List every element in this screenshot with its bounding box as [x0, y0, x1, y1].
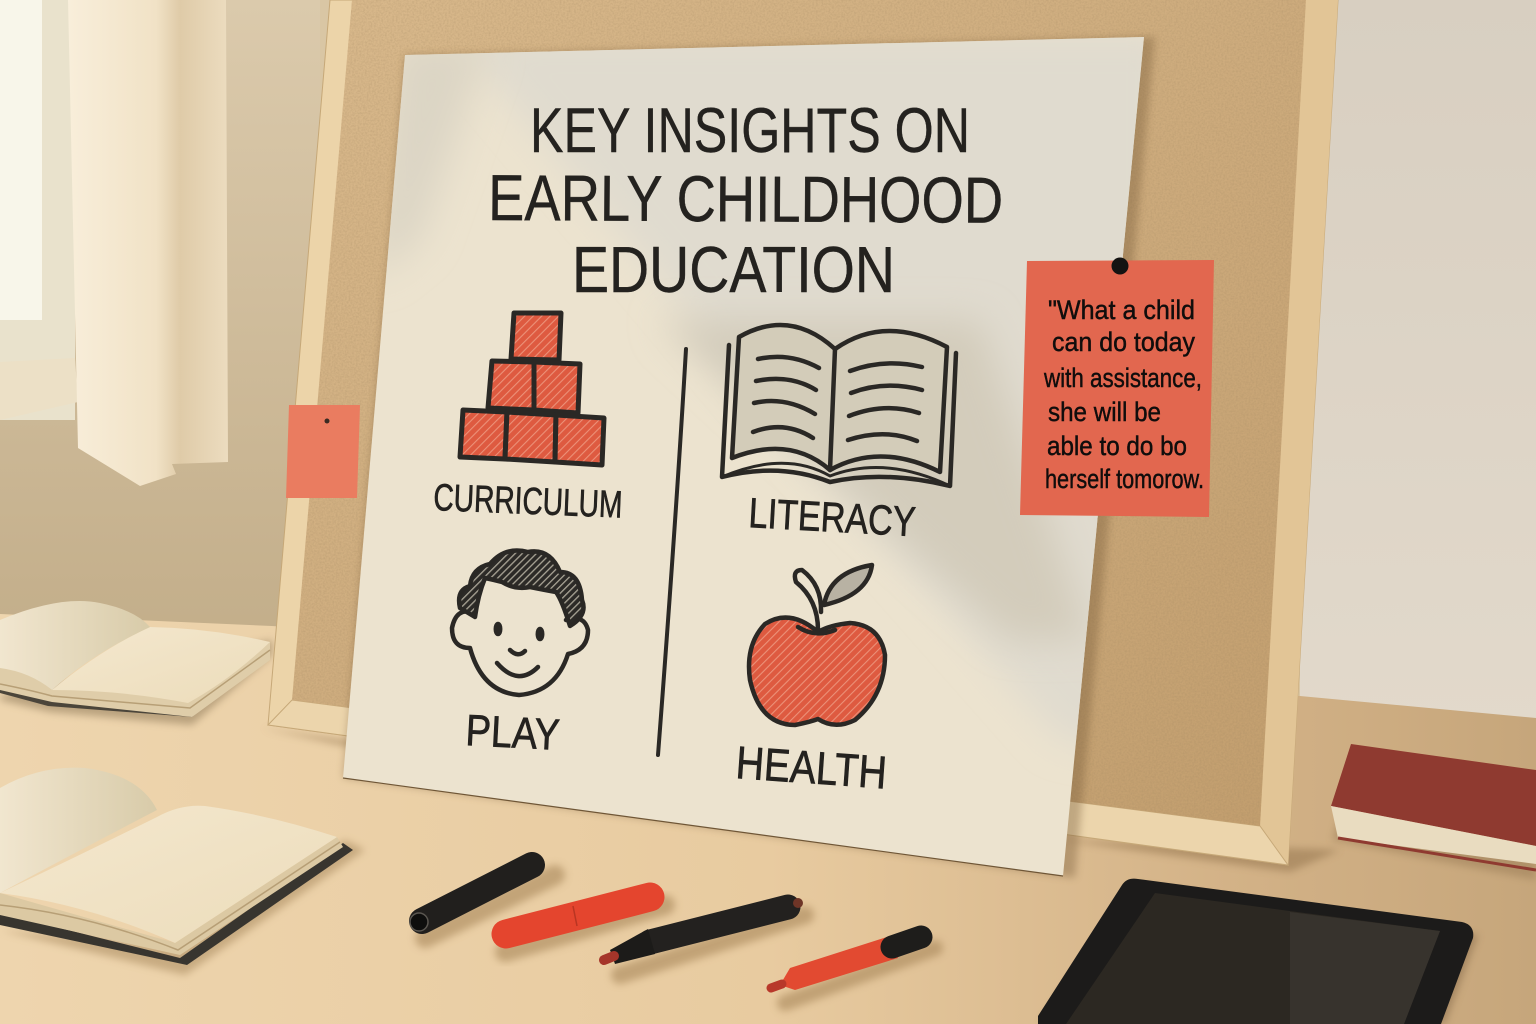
title: KEY INSIGHTS ON — [530, 96, 970, 166]
window — [0, 0, 78, 420]
cork texture — [292, 0, 1306, 826]
quote text: herself tomorow. — [1045, 464, 1204, 494]
icon: open book — [722, 325, 956, 486]
red book — [1331, 744, 1536, 880]
desk shadow behind board — [262, 728, 1340, 872]
left wall — [0, 0, 320, 640]
cork surface — [292, 0, 1306, 826]
poster shadow — [343, 37, 1155, 878]
title: EARLY CHILDHOOD — [488, 161, 1003, 237]
icon: stacked blocks — [460, 313, 604, 465]
back book — [0, 601, 272, 725]
red marker 2 — [771, 936, 935, 1003]
sticky note with quote — [1020, 258, 1214, 517]
pin — [1112, 258, 1128, 274]
right wall — [1300, 0, 1536, 730]
label: play: PLAY — [464, 706, 561, 760]
desk — [0, 614, 1536, 1024]
tablet — [1038, 879, 1478, 1024]
markers — [410, 865, 935, 1003]
red marker 1 — [505, 897, 665, 952]
title: EDUCATION — [572, 233, 895, 306]
poster — [343, 30, 1170, 876]
black marker 2 — [604, 898, 805, 975]
curtain — [68, 0, 228, 486]
quote text: able to do bo — [1047, 431, 1187, 461]
divider line — [658, 349, 686, 755]
label: curriculum: CURRICULUM — [433, 477, 623, 527]
quote text: she will be — [1048, 397, 1161, 427]
quote text: with assistance, — [1043, 363, 1202, 393]
corkboard support — [715, 0, 765, 46]
icon: apple — [749, 565, 885, 725]
title — [488, 96, 1003, 306]
label: literacy: LITERACY — [747, 489, 917, 545]
small sticky note — [286, 405, 360, 498]
black marker 1 — [410, 865, 555, 938]
icon: child face — [452, 550, 588, 695]
label: health: HEALTH — [734, 736, 889, 799]
corkboard frame — [268, 0, 1338, 865]
quote text: can do today — [1052, 327, 1195, 357]
quote text: "What a child — [1048, 295, 1195, 325]
front notebook — [0, 768, 365, 975]
quote text — [1043, 295, 1204, 494]
